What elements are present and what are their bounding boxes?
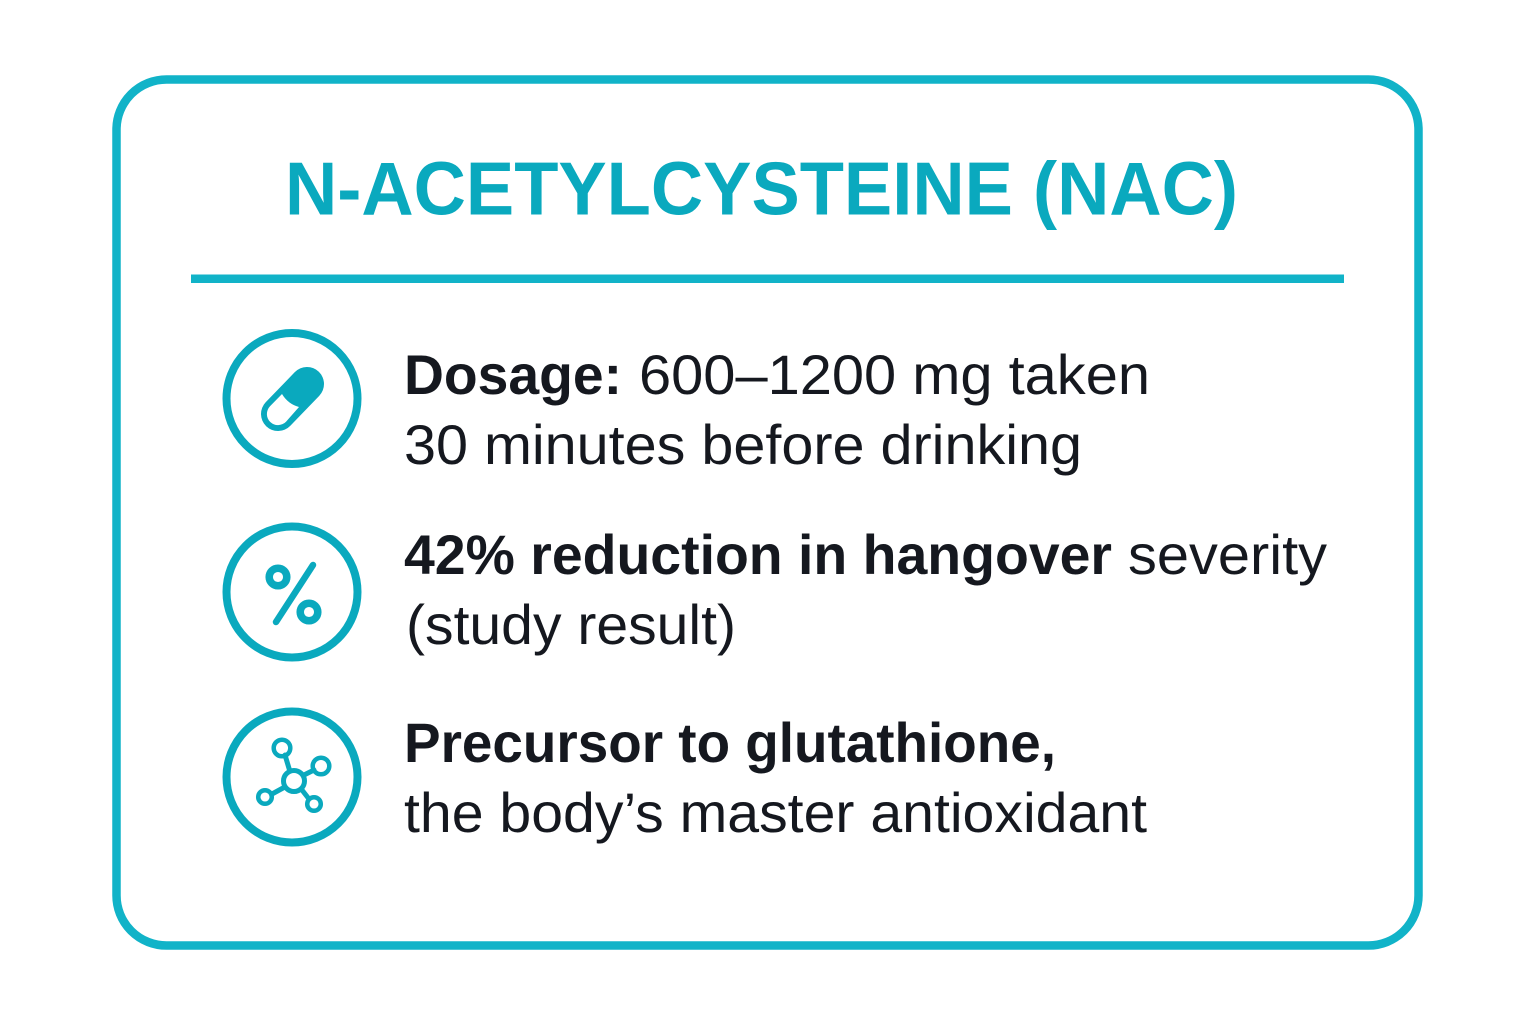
row: study result <box>226 523 1327 658</box>
text: glutathione precursor <box>404 711 1147 844</box>
text: hangover reduction: (study result) <box>406 593 736 656</box>
text: hangover reduction <box>404 523 1327 656</box>
row: glutathione <box>226 711 1147 844</box>
icon: pill capsule <box>226 333 358 464</box>
text: dosage: Dosage: <box>404 343 622 406</box>
icon: molecule <box>226 712 358 842</box>
text: dosage <box>404 343 1150 476</box>
text: glutathione precursor: Precursor to glutathione, <box>404 711 1056 774</box>
text: glutathione precursor: the body’s master antioxidant <box>404 781 1147 844</box>
text: dosage: 600–1200 mg taken <box>639 343 1150 406</box>
row: dosage <box>226 333 1150 476</box>
icon: percent <box>226 526 358 658</box>
title divider <box>191 274 1344 283</box>
text: hangover reduction: severity <box>1128 523 1327 586</box>
text: hangover reduction: 42% reduction in hangover <box>404 523 1112 586</box>
text: dosage: 30 minutes before drinking <box>404 413 1082 476</box>
title: N-ACETYLCYSTEINE (NAC) <box>285 146 1238 230</box>
panel: NAC card <box>116 80 1418 946</box>
